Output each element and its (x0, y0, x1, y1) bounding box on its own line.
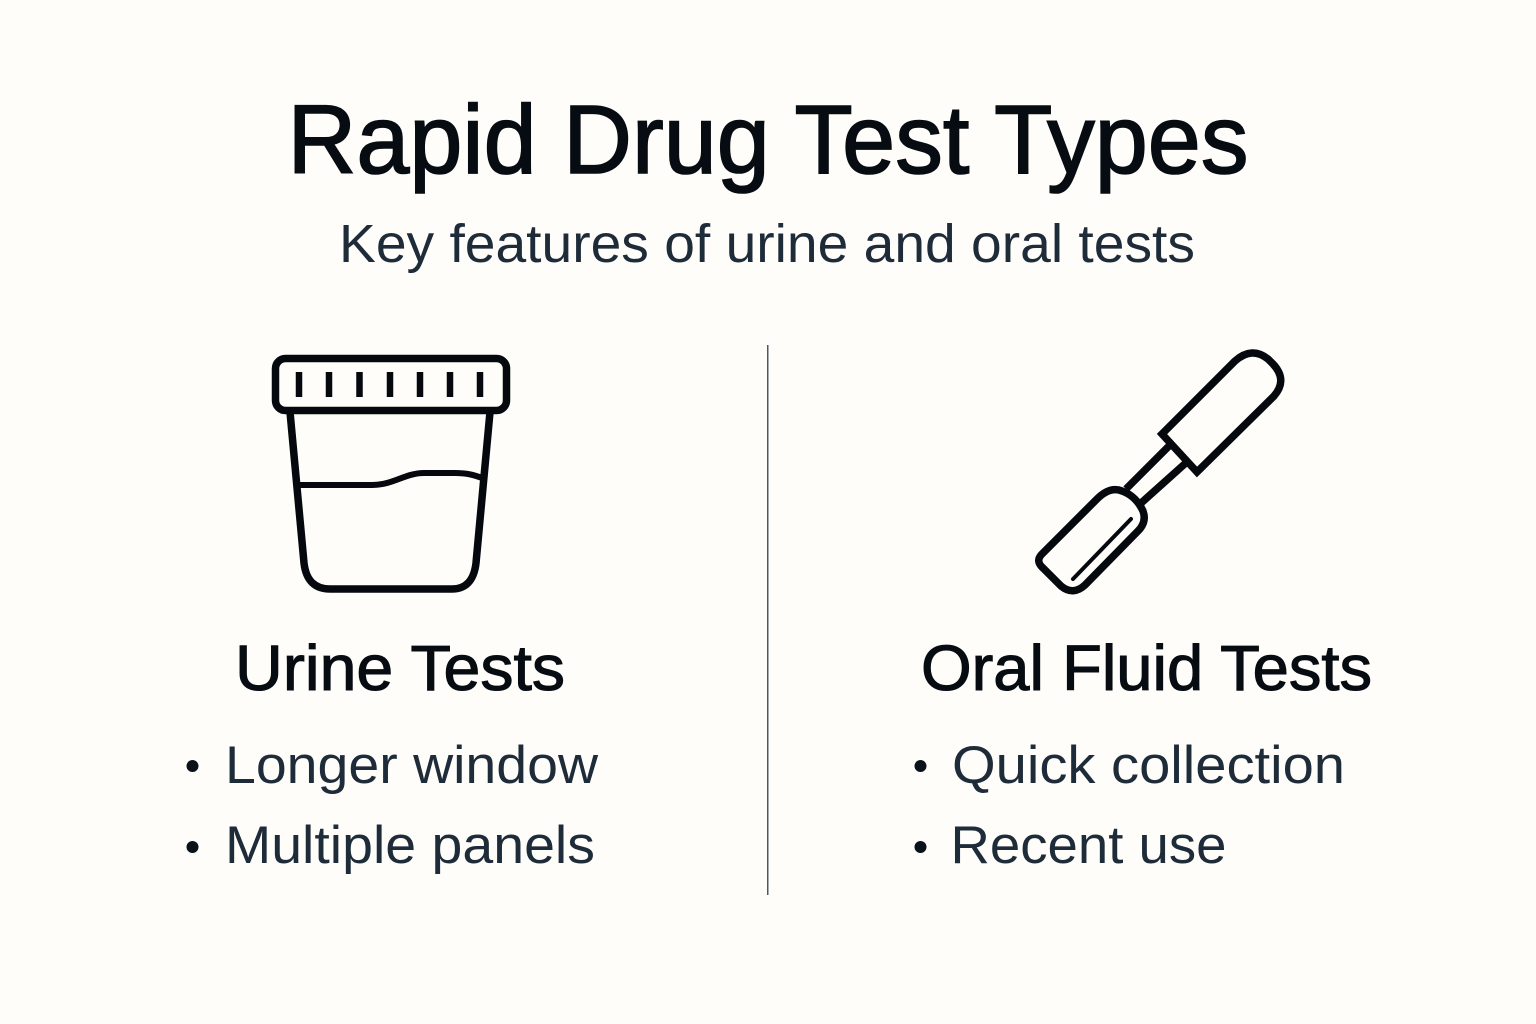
bullet: recent use: Recent use (950, 816, 1226, 875)
heading: urine tests: Urine Tests (235, 632, 565, 704)
icon: oral swab (1039, 353, 1281, 591)
bullet: quick collection: Quick collection (952, 736, 1345, 795)
panel: urine tests (186, 358, 599, 875)
panel: oral fluid tests (914, 353, 1372, 875)
subtitle: Key features of urine and oral tests (339, 214, 1195, 274)
bullet list: oral (914, 736, 1345, 875)
heading: oral fluid tests: Oral Fluid Tests (921, 632, 1372, 704)
bullet: multiple panels: Multiple panels (225, 816, 595, 875)
divider (767, 345, 768, 895)
icon: specimen cup (276, 358, 506, 589)
bullet list: urine (186, 736, 599, 875)
title: Rapid Drug Test Types (288, 85, 1248, 194)
bullet: longer window: Longer window (225, 736, 599, 795)
